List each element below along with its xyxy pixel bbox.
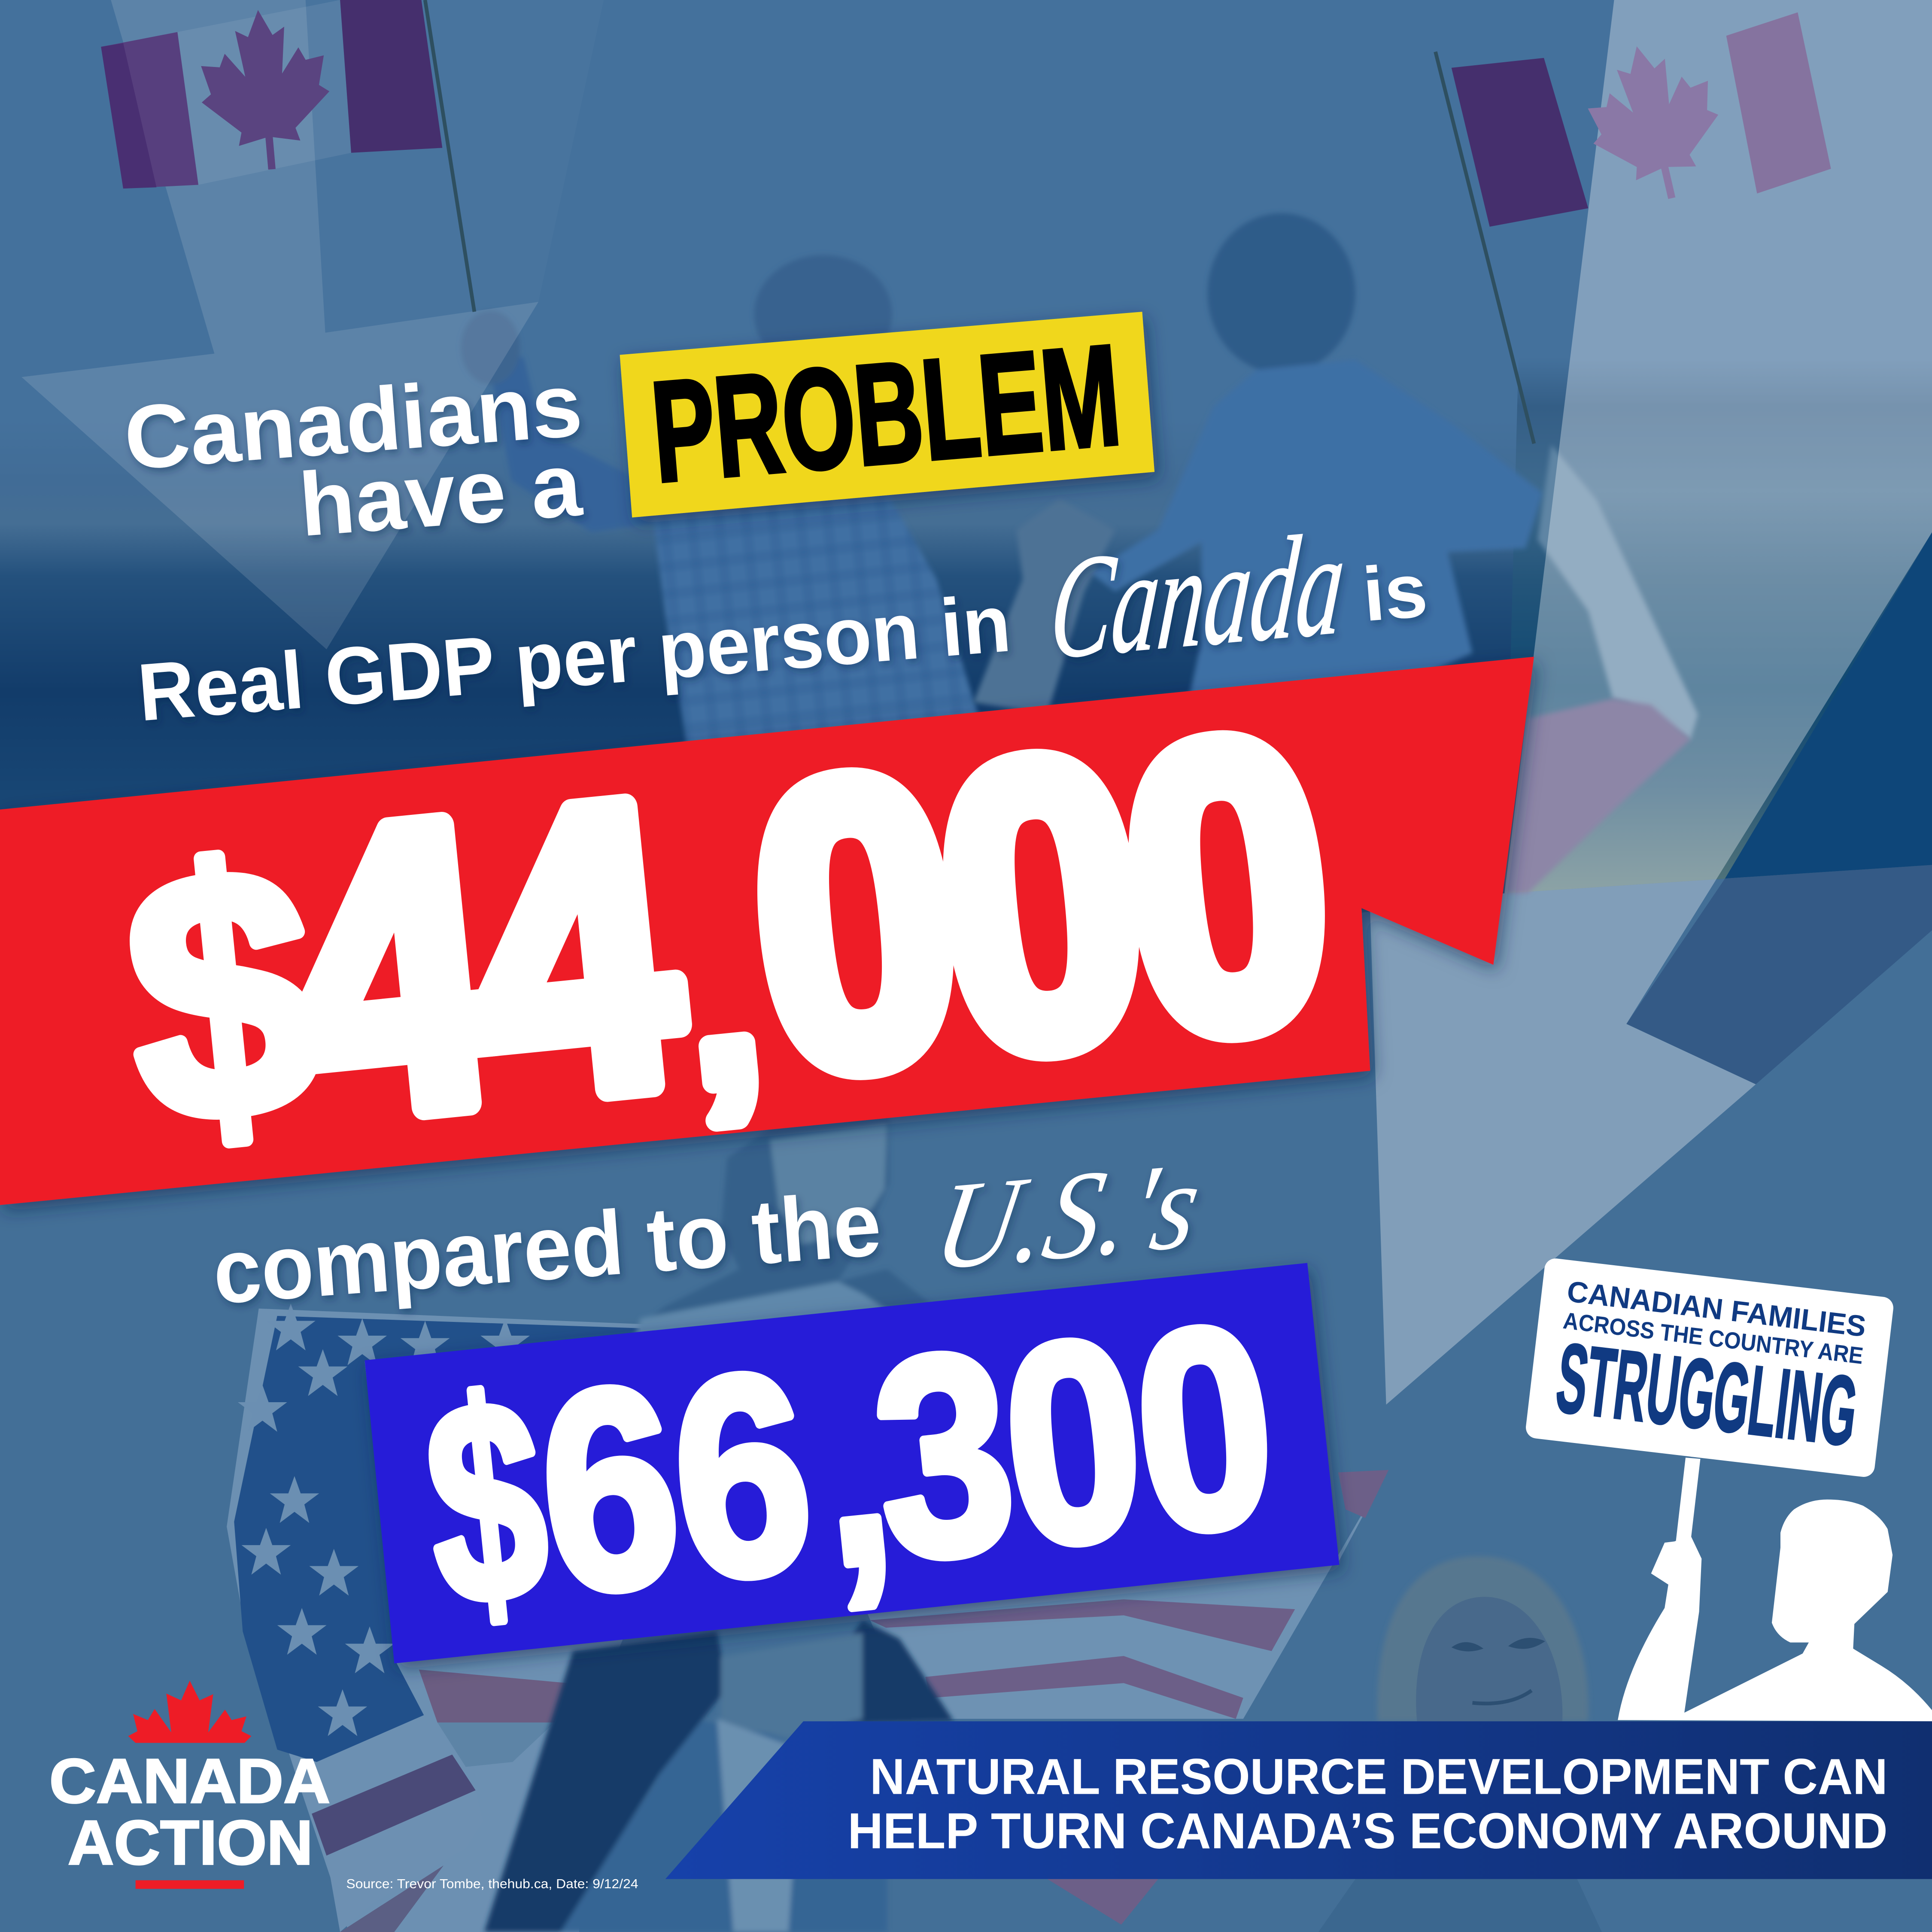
photo: landscape with children: [0, 0, 1932, 1047]
heading: Canadians have a: [121, 354, 586, 555]
flag stars: [238, 1303, 530, 1736]
flag body: [227, 1309, 739, 1932]
man figure: [484, 1620, 954, 1932]
red banner: $44,000: $: [112, 793, 333, 1197]
bottom banner: [665, 1721, 1932, 1879]
flag stripes, left: [419, 1670, 568, 1722]
flag stripes, right: [863, 1473, 1386, 1719]
red banner: $44,000: 000: [735, 651, 1348, 1157]
red banner: $44,000: ,: [674, 855, 769, 1136]
heading label: PROBLEM: PROBLEM: [646, 315, 1126, 512]
sign text: CANADIAN FAMILIES: [1565, 1275, 1868, 1343]
subheading: Real GDP per person in Canada is: Real GDP per person in: [135, 578, 1014, 738]
subheading: Real GDP per person in Canada is: Canada: [1045, 501, 1351, 690]
logo maple leaf: [128, 1681, 251, 1743]
sign text: ACROSS THE COUNTRY ARE: [1562, 1307, 1865, 1369]
red banner: $44,000: 44: [271, 716, 699, 1203]
subheading: compared to the U.S.'s: [210, 1135, 1210, 1323]
woman head: [629, 1115, 949, 1392]
person silhouette: [1618, 1500, 1932, 1721]
logo wordmark: CANADA: [49, 1747, 330, 1817]
photo: right child: [973, 213, 1543, 727]
sign text: [1551, 1275, 1868, 1467]
logo: Canada Action: ACTION: [68, 1808, 313, 1878]
sign stick: [1676, 1458, 1700, 1543]
subheading: Real GDP per person in Canada is: is: [1360, 547, 1431, 637]
subheading: Real GDP per person in Canada is: [135, 501, 1431, 738]
translucent arrow panel, right: [1370, 0, 1932, 1405]
subheading: compared to the U.S.'s: U.S.'s: [925, 1135, 1210, 1297]
photo: lower family with American flag: [227, 1115, 1388, 1932]
heading: Canadians have a: Canadians: [121, 354, 586, 489]
protester sign: [1525, 1257, 1895, 1543]
heading label: PROBLEM: [620, 312, 1154, 517]
subheading: compared to the U.S.'s: compared to the: [210, 1173, 884, 1323]
photo: parent sleeve: [1504, 699, 1691, 893]
translucent arrow shape, top-left: [21, 0, 604, 649]
sign board: [1525, 1257, 1895, 1478]
blue banner: $66,300: 66,300: [527, 1264, 1287, 1653]
photo: left child: [461, 255, 986, 764]
logo underline: [136, 1880, 244, 1889]
bottom banner: NATURAL RESOURCE DEVELOPMENT CAN: [870, 1748, 1888, 1805]
heading: Canadians have a: have a: [296, 434, 585, 555]
logo: Canada Action: [49, 1681, 330, 1889]
source note: Source: Trevor Tombe, thehub.ca, Date: 9/12/24: [346, 1877, 638, 1891]
dark geometric shapes, right: [1626, 532, 1932, 1084]
Canadian flag, top-left: [101, 0, 474, 312]
flag canton: [234, 1316, 647, 1762]
bottom flag remainder: [1047, 1879, 1158, 1925]
bottom banner: HELP TURN CANADA’S ECONOMY AROUND: [848, 1802, 1888, 1859]
blue banner: $66,300: $: [414, 1339, 559, 1665]
red banner: $44,000: [0, 651, 1534, 1205]
photo: woman at lower right: [1318, 1556, 1602, 1932]
photo: parent arm: [1538, 445, 1698, 739]
Canadian flag, top-right: [1435, 12, 1831, 444]
